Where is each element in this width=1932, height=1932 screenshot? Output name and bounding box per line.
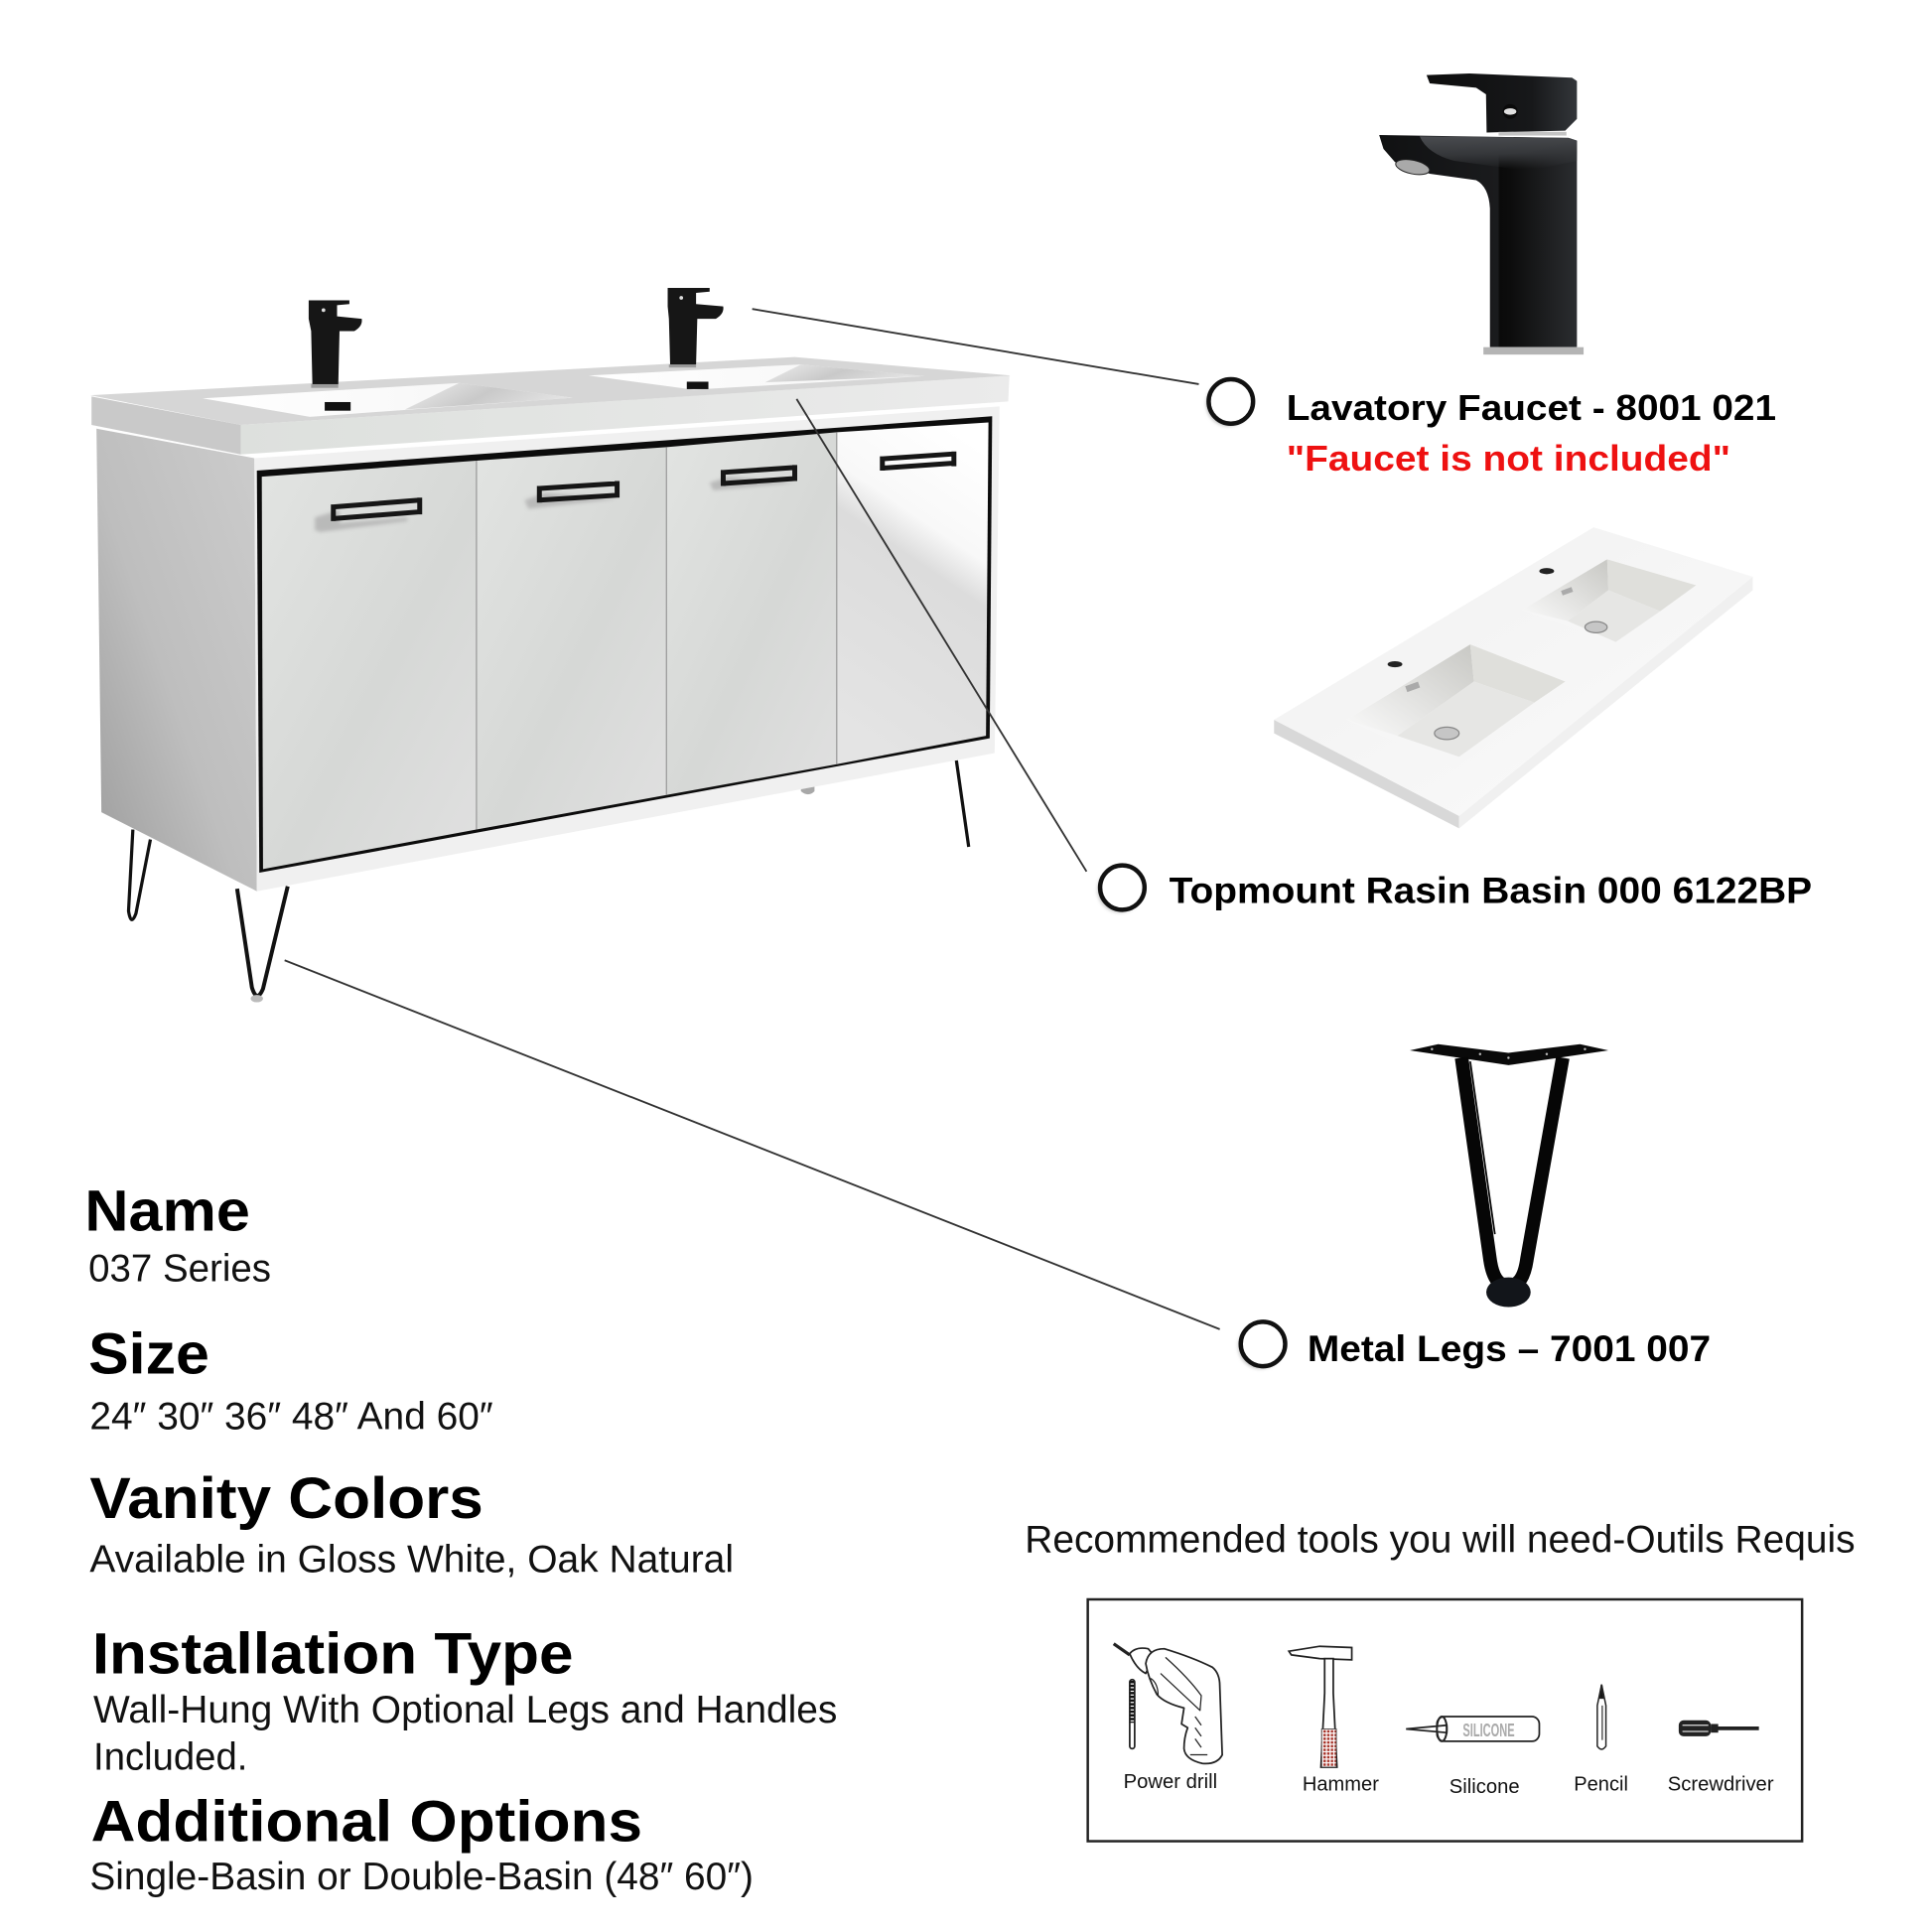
black door frame: [257, 416, 992, 873]
spec: installation type: Included.: [93, 1735, 247, 1778]
cabinet front frame: [254, 406, 1000, 892]
spec: vanity colors: Vanity Colors: [89, 1466, 483, 1531]
lever knob: [1503, 104, 1518, 119]
countertop left side: [91, 396, 241, 455]
door two: [477, 447, 666, 830]
label: Screwdriver: [1668, 1773, 1774, 1796]
icon: silicone tube: SILICONE: [1462, 1720, 1515, 1740]
leader line: faucet: [753, 309, 1198, 384]
door one: [262, 461, 477, 869]
spec: installation type: [92, 1622, 837, 1778]
leader line: basin: [796, 399, 1086, 872]
left vanity faucet: [309, 300, 362, 388]
panel: recommended tools: [1088, 1599, 1802, 1842]
spec: additional options: Additional Options: [91, 1790, 642, 1855]
spec: name: [84, 1178, 271, 1290]
callout ring: [1238, 1321, 1285, 1369]
overflow slots: [325, 402, 350, 411]
vanity cabinet illustration: [90, 288, 1011, 1003]
aerator: [1394, 157, 1431, 178]
right vanity faucet: [668, 288, 724, 367]
back left hairpin leg: [128, 830, 150, 919]
door dividers: [477, 432, 837, 830]
icon: hammer: [1289, 1646, 1352, 1767]
drain pipe: [801, 785, 814, 794]
right sink: [1522, 559, 1696, 644]
spec: additional options: [89, 1790, 754, 1898]
label: metal legs: [1238, 1321, 1711, 1369]
label: Silicone: [1449, 1775, 1520, 1798]
spec: vanity colors: [89, 1466, 734, 1582]
tools heading: Recommended tools you will need-Outils Requis: [1025, 1519, 1856, 1562]
spec: size: 24″ 30″ 36″ 48″ And 60″: [89, 1395, 493, 1438]
label: Hammer: [1303, 1773, 1379, 1796]
icon: double basin top: [1274, 527, 1752, 828]
back right leg: [956, 760, 969, 847]
spec: additional options: Single-Basin or Double-Basin (48″ 60″): [89, 1856, 754, 1898]
callout ring: [1206, 379, 1253, 426]
countertop top surface: [90, 357, 1011, 425]
door three: [666, 432, 837, 795]
spec: installation type: Wall-Hung With Optional Legs and Handles: [93, 1689, 837, 1731]
label: Pencil: [1574, 1773, 1628, 1796]
base plate: [1483, 347, 1584, 354]
left sink: [1347, 644, 1566, 769]
chrome ring: [1498, 132, 1567, 136]
front hairpin leg: [237, 887, 288, 996]
icon: screwdriver: [1679, 1721, 1759, 1736]
lever: [1427, 73, 1577, 132]
label: Power drill: [1124, 1770, 1217, 1793]
countertop front edge: [241, 375, 1010, 455]
spec: size: Size: [88, 1322, 209, 1387]
door four: [837, 422, 989, 764]
callout text: Metal Legs – 7001 007: [1308, 1327, 1711, 1369]
icon: hairpin metal leg: [1410, 1044, 1608, 1307]
icon: silicone tube: [1406, 1717, 1539, 1741]
right basin: [589, 364, 924, 390]
spout and body: [1379, 135, 1577, 347]
left basin: [203, 383, 573, 417]
cabinet side panel: [96, 429, 257, 892]
callout text: Topmount Rasin Basin 000 6122BP: [1170, 870, 1812, 911]
spec: size: [88, 1322, 493, 1438]
red note: "Faucet is not included": [1287, 438, 1730, 479]
spec: installation type: Installation Type: [92, 1622, 573, 1687]
icon: black faucet photo: [1379, 73, 1584, 354]
spec: name: 037 Series: [88, 1247, 271, 1290]
spout highlight: [1420, 136, 1577, 171]
callout text: Lavatory Faucet - 8001 021: [1287, 387, 1776, 428]
label: lavatory faucet: [1206, 379, 1776, 428]
callout ring: [1098, 866, 1145, 912]
door handles: [315, 452, 954, 532]
leader line: legs: [285, 960, 1220, 1329]
icon: pencil: [1597, 1685, 1606, 1749]
spec: name: Name: [84, 1178, 250, 1243]
spec: vanity colors: Available in Gloss White, Oak Natural: [89, 1539, 734, 1582]
label: topmount basin: [1098, 866, 1812, 912]
icon: power drill: [1114, 1644, 1222, 1763]
